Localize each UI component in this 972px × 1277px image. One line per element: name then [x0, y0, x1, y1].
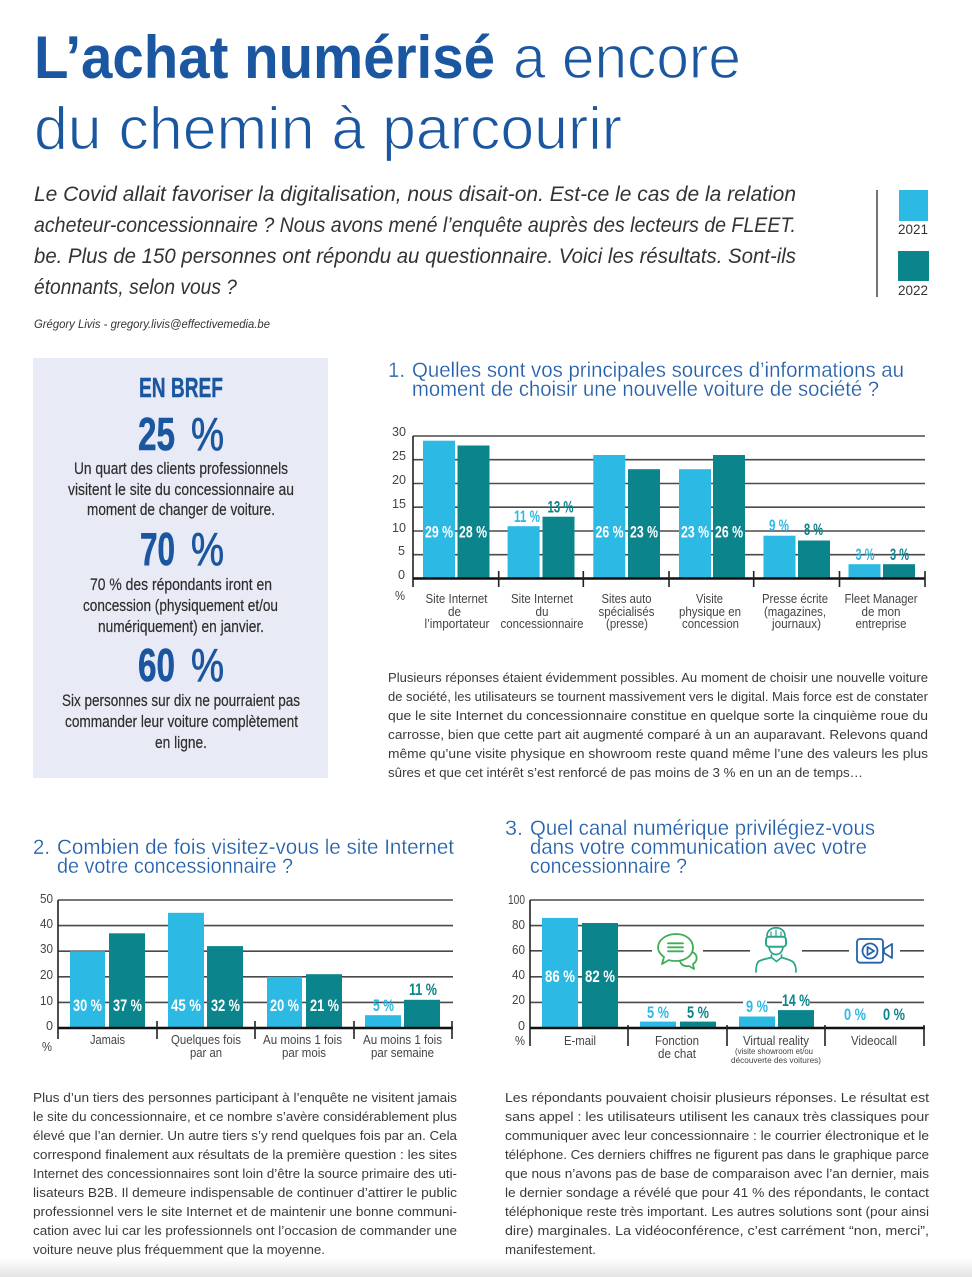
value labels: 5 % — [687, 1003, 709, 1022]
heading: question 1: Quelles sont vos principales sources d’informations au — [412, 358, 904, 382]
y axis labels: 40 — [512, 967, 525, 982]
value labels: 5 % — [373, 996, 394, 1015]
stat: 60 % — [62, 639, 300, 752]
y axis labels: 10 — [392, 520, 406, 535]
category labels — [564, 1033, 897, 1065]
stat: 25 %: visitent le site du concessionnaire au — [68, 480, 294, 499]
intro text: be. Plus de 150 personnes ont répondu au questionnaire. Voici les résultats. Sont-ils — [34, 245, 796, 268]
heading: question 1: moment de choisir une nouvelle voiture de société ? — [412, 377, 879, 401]
text block: question 1 commentary: sûres et que cet intérêt s’est renforcé de pas moins de 3 % en un an de temps… — [388, 765, 863, 780]
title: L’achat numérisé — [34, 24, 495, 91]
icon: video call camera — [857, 939, 892, 963]
stat: 25 %: Un quart des clients professionnels — [74, 459, 288, 478]
y axis labels: 80 — [512, 917, 525, 932]
category labels: (visite showroom et/ou — [735, 1046, 813, 1056]
y axis labels: 0 — [46, 1018, 53, 1033]
category labels: Sites auto — [602, 591, 652, 606]
text block: question 3 commentary: communiquer avec leur concessionnaire : le courrier électronique et le — [505, 1128, 929, 1143]
intro text — [34, 183, 796, 299]
y axis labels: % — [515, 1033, 525, 1048]
text block: question 1 commentary: de société, les utilisateurs se tournent massivement vers le digital. Mais force est de constater — [388, 689, 929, 704]
panel: en bref — [33, 358, 328, 778]
text block: question 1 commentary: que le site Internet du concessionnaire constitue en quelque sorte la cinquième roue du — [388, 708, 928, 723]
y axis labels: 30 — [392, 424, 406, 439]
heading: question 2: 2. — [33, 835, 50, 859]
text block: question 3 commentary: que nous n’avons pas de base de comparaison avec l’an dernier, mais — [505, 1166, 929, 1181]
stat: 70 %: 70 — [140, 523, 175, 575]
text block: question 1 commentary: même qu’une visite physique en showroom reste quand même l’une des valeurs les plus — [388, 746, 928, 761]
category labels: par mois — [282, 1045, 326, 1060]
category labels: Videocall — [851, 1033, 897, 1048]
heading: question 2: Combien de fois visitez-vous le site Internet — [57, 835, 454, 859]
legend — [877, 190, 929, 298]
stat: 60 %: Six personnes sur dix ne pourraient pas — [62, 691, 300, 710]
text block: question 1 commentary: carrosse, bien que cette part ait augmenté comparé à un an auparavant. Relevons quand — [388, 727, 928, 742]
bars — [70, 913, 440, 1028]
y axis labels: 100 — [508, 892, 525, 907]
stat: 60 %: en ligne. — [155, 733, 207, 752]
y axis labels: 25 — [392, 448, 406, 463]
text block: question 3 commentary: manifestement. — [505, 1242, 596, 1257]
bar chart: question 1 — [392, 424, 925, 631]
y axis labels: % — [395, 588, 405, 603]
category labels: entreprise — [856, 616, 906, 631]
value labels: 3 % — [890, 545, 909, 564]
value labels: 30 % — [73, 996, 102, 1015]
stat: 25 %: 25 — [138, 408, 175, 460]
text block: question 1 commentary: Plusieurs réponses étaient évidemment possibles. Au moment de choisir une nouvelle voiture — [388, 670, 928, 685]
bar chart: question 2 — [40, 891, 453, 1060]
text block: question 3 commentary — [505, 1090, 930, 1257]
title: a encore — [513, 24, 741, 91]
value labels: 20 % — [270, 996, 299, 1015]
value labels: 9 % — [769, 516, 789, 535]
stat: 25 %: moment de changer de voiture. — [87, 500, 275, 519]
category labels: découverte des voitures) — [731, 1055, 821, 1065]
intro text: Le Covid allait favoriser la digitalisation, nous disait-on. Est-ce le cas de la relation — [34, 183, 796, 206]
value labels: 28 % — [459, 522, 487, 542]
y axis labels: 40 — [40, 916, 53, 931]
heading: question 3: concessionnaire ? — [530, 854, 687, 878]
heading: question 1: 1. — [388, 358, 405, 382]
icon: VR headset person — [756, 928, 796, 972]
stat: 70 %: numériquement) en janvier. — [98, 617, 264, 636]
y axis labels: 10 — [40, 993, 53, 1008]
value labels: 26 % — [596, 522, 624, 542]
title — [34, 24, 741, 162]
stat: 70 %: 70 % des répondants iront en — [90, 575, 272, 594]
category labels: Jamais — [90, 1032, 125, 1047]
legend: 2022 — [898, 282, 928, 298]
category labels: Presse écrite — [762, 591, 828, 606]
stat: 25 %: % — [191, 408, 224, 460]
text block: question 2 commentary: le site du concessionnaire, et ce nombre s’avère considérablement plus — [33, 1109, 457, 1124]
value labels — [425, 498, 909, 564]
value labels — [545, 967, 905, 1024]
text block: question 1 commentary — [388, 670, 929, 780]
heading: question 3 — [505, 816, 875, 878]
value labels: 13 % — [548, 498, 574, 516]
text block: question 2 commentary: professionnel vers le site Internet et de maintenir une bonne communi- — [33, 1204, 457, 1219]
bars — [423, 441, 915, 578]
y axis labels: 60 — [512, 942, 525, 957]
text block: question 2 commentary: lisateurs B2B. Il demeure indispensable de continuer d’attirer le public — [33, 1185, 457, 1200]
category labels: par an — [190, 1045, 222, 1060]
category labels: concessionnaire — [500, 616, 584, 631]
category labels: journaux) — [771, 616, 821, 631]
category labels: (presse) — [606, 616, 648, 631]
text block: question 3 commentary: téléphonique reste très important. Les autres solutions sont (pour ainsi — [505, 1204, 929, 1219]
bar chart: question 3 — [508, 892, 925, 1065]
value labels: 82 % — [585, 967, 615, 986]
stat: 70 % — [83, 523, 278, 636]
value labels: 26 % — [715, 522, 743, 542]
text block: question 3 commentary: téléphone. Ces derniers chiffres ne figurent pas dans le graphique parce — [505, 1147, 929, 1162]
text block: question 2 commentary: Internet des concessionnaires sont loin d’être la source primaire des uti- — [33, 1166, 457, 1181]
author byline: Grégory Livis - gregory.livis@effectivemedia.be — [34, 317, 270, 331]
category labels — [424, 591, 918, 631]
heading: question 3: 3. — [505, 816, 523, 840]
category labels: de mon — [862, 604, 900, 619]
value labels: 8 % — [804, 520, 823, 539]
text block: question 3 commentary: dire) marginales. La vidéoconférence, c’est carrément “non, merci”, — [505, 1223, 929, 1238]
stat: 70 %: % — [191, 523, 224, 575]
y axis labels — [392, 424, 406, 603]
text block: question 2 commentary: élevé que l’an dernier. Un autre tiers s’y rend quelques fois par an. Cela — [33, 1128, 458, 1143]
value labels: 11 % — [409, 980, 437, 999]
icon: chat bubbles — [658, 934, 697, 969]
category labels: Fonction — [655, 1033, 699, 1048]
intro text: étonnants, selon vous ? — [34, 276, 237, 299]
y axis labels: 20 — [40, 967, 53, 982]
stat: 25 % — [68, 408, 294, 519]
category labels: Quelques fois — [171, 1032, 241, 1047]
value labels: 37 % — [113, 996, 142, 1015]
category labels: Fleet Manager — [844, 591, 918, 606]
heading: question 2 — [33, 835, 454, 878]
value labels — [73, 980, 437, 1015]
category labels: de chat — [658, 1046, 696, 1061]
text block: question 3 commentary: Les répondants pouvaient choisir plusieurs réponses. Le résultat est — [505, 1090, 929, 1105]
category labels: du — [536, 604, 548, 619]
value labels: 5 % — [647, 1003, 669, 1022]
category labels: Site Internet — [511, 591, 573, 606]
intro text: acheteur-concessionnaire ? Nous avons mené l’enquête auprès des lecteurs de FLEET. — [34, 214, 796, 237]
category labels: par semaine — [371, 1045, 434, 1060]
category labels: Site Internet — [426, 591, 488, 606]
category labels: Au moins 1 fois — [363, 1032, 442, 1047]
bars — [542, 918, 913, 1028]
value labels: 0 % — [844, 1005, 866, 1024]
value labels: 14 % — [782, 991, 810, 1010]
stat: 60 %: commander leur voiture complètement — [65, 712, 298, 731]
category labels: E-mail — [564, 1033, 596, 1048]
y axis labels — [508, 892, 525, 1048]
y axis labels: 20 — [512, 992, 525, 1007]
heading: question 2: de votre concessionnaire ? — [57, 854, 293, 878]
y axis labels: 20 — [392, 472, 406, 487]
stat: 70 %: concession (physiquement et/ou — [83, 596, 278, 615]
heading: question 3: dans votre communication avec votre — [530, 835, 867, 859]
category labels: Virtual reality — [743, 1033, 809, 1048]
category labels: physique en — [679, 604, 741, 619]
text block: question 3 commentary: le dernier sondage a révélé que pour 41 % des répondants, le contact — [505, 1185, 929, 1200]
value labels: 29 % — [425, 522, 453, 542]
value labels: 86 % — [545, 967, 575, 986]
text block: question 2 commentary: correspond finalement aux résultats de la première question : les sites — [33, 1147, 457, 1162]
category labels: spécialisés — [598, 604, 655, 619]
y axis labels: 15 — [392, 496, 406, 511]
panel heading: EN BREF — [139, 372, 223, 403]
heading: question 3: Quel canal numérique privilégiez-vous — [530, 816, 875, 840]
value labels: 23 % — [681, 522, 709, 542]
y axis labels: 5 — [398, 543, 405, 558]
y axis labels: 30 — [40, 941, 53, 956]
y axis labels: 0 — [398, 567, 405, 582]
title: du chemin à parcourir — [34, 95, 622, 162]
category labels: concession — [682, 616, 739, 631]
category labels: de — [448, 604, 461, 619]
text block: question 2 commentary: Plus d’un tiers des personnes participant à l’enquête ne visitent jamais — [33, 1090, 457, 1105]
category labels: l’importateur — [424, 616, 490, 631]
value labels: 11 % — [514, 507, 540, 526]
category labels — [90, 1032, 442, 1060]
stat: 60 %: 60 — [138, 639, 175, 691]
value labels: 45 % — [171, 996, 201, 1015]
value labels: 0 % — [883, 1005, 905, 1024]
value labels: 32 % — [211, 996, 240, 1015]
category labels: Au moins 1 fois — [263, 1032, 342, 1047]
y axis labels: 50 — [40, 891, 53, 906]
y axis labels — [40, 891, 53, 1054]
value labels: 23 % — [630, 522, 658, 542]
text block: question 2 commentary: cation avec lui car les professionnels ont l’occasion de commander une — [33, 1223, 457, 1238]
heading: question 1 — [388, 358, 904, 401]
category labels: (magazines, — [764, 604, 826, 619]
value labels: 9 % — [746, 997, 768, 1016]
value labels: 21 % — [310, 996, 339, 1015]
legend: 2021 — [898, 221, 928, 237]
y axis labels: % — [42, 1039, 52, 1054]
stat: 60 %: % — [191, 639, 224, 691]
text block: question 2 commentary — [33, 1090, 458, 1257]
value labels: 3 % — [856, 545, 874, 564]
text block: question 3 commentary: sans appel : les utilisateurs utilisent les canaux très classiques pour — [505, 1109, 930, 1124]
y axis labels: 0 — [518, 1018, 525, 1033]
text block: question 2 commentary: voiture neuve plus fréquemment que la moyenne. — [33, 1242, 325, 1257]
category labels: Visite — [696, 591, 723, 606]
